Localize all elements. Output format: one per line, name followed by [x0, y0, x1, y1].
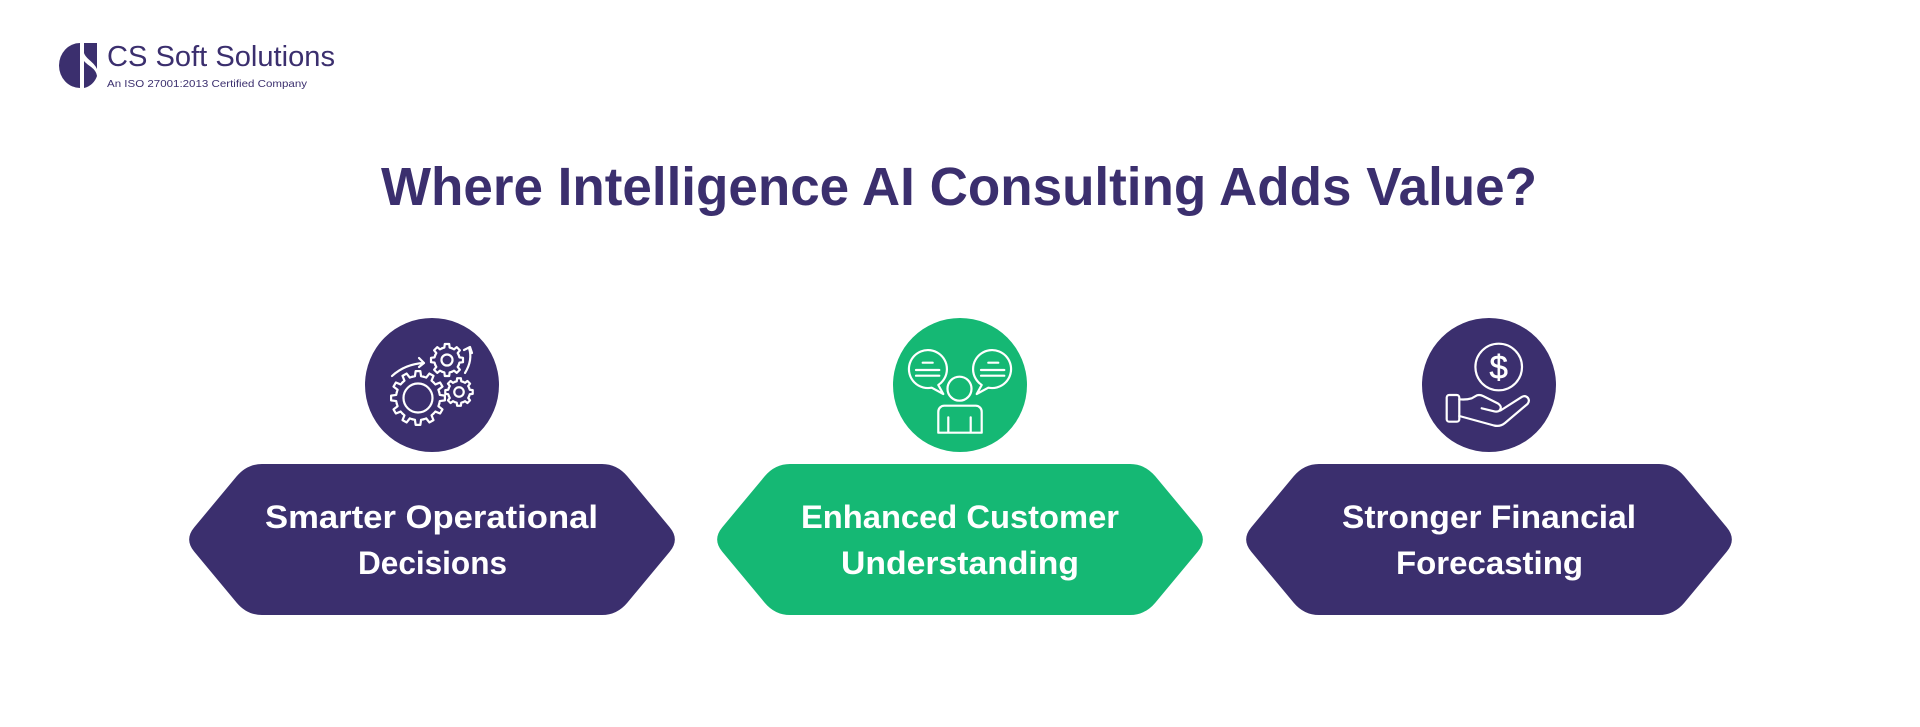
label shape [189, 464, 675, 615]
icon circle: gears and arrows [365, 318, 499, 452]
panel: smarter operational decisions [189, 318, 675, 615]
label text: Stronger Financial [1342, 499, 1636, 535]
logo mark [59, 43, 97, 88]
label text: Enhanced Customer [801, 499, 1119, 535]
title: Where Intelligence AI Consulting Adds Value? [381, 157, 1537, 217]
icon circle: person with speech bubbles [893, 318, 1027, 452]
label shape [1246, 464, 1732, 615]
label text: Smarter Operational [265, 499, 598, 535]
panel: enhanced customer understanding [717, 318, 1203, 615]
logo: CS Soft Solutions [59, 41, 335, 90]
arrow up [464, 347, 472, 373]
big gear [391, 371, 445, 425]
upper gear [431, 344, 463, 376]
arrow right [392, 358, 424, 376]
left speech bubble [909, 350, 947, 394]
person [948, 377, 972, 401]
label shape [717, 464, 1203, 615]
hand [1447, 395, 1459, 422]
label text: Forecasting [1396, 545, 1583, 581]
coin [1475, 344, 1522, 390]
logo tagline: An ISO 27001:2013 Certified Company [107, 78, 308, 90]
dollar sign: $ [1490, 348, 1508, 386]
panel: stronger financial forecasting [1246, 318, 1732, 615]
logo name: CS Soft Solutions [107, 41, 335, 73]
right speech bubble [973, 350, 1011, 394]
label text: Decisions [358, 545, 507, 581]
icon circle: hand holding coin [1422, 318, 1556, 452]
lower gear [445, 378, 473, 406]
label text: Understanding [841, 545, 1079, 581]
